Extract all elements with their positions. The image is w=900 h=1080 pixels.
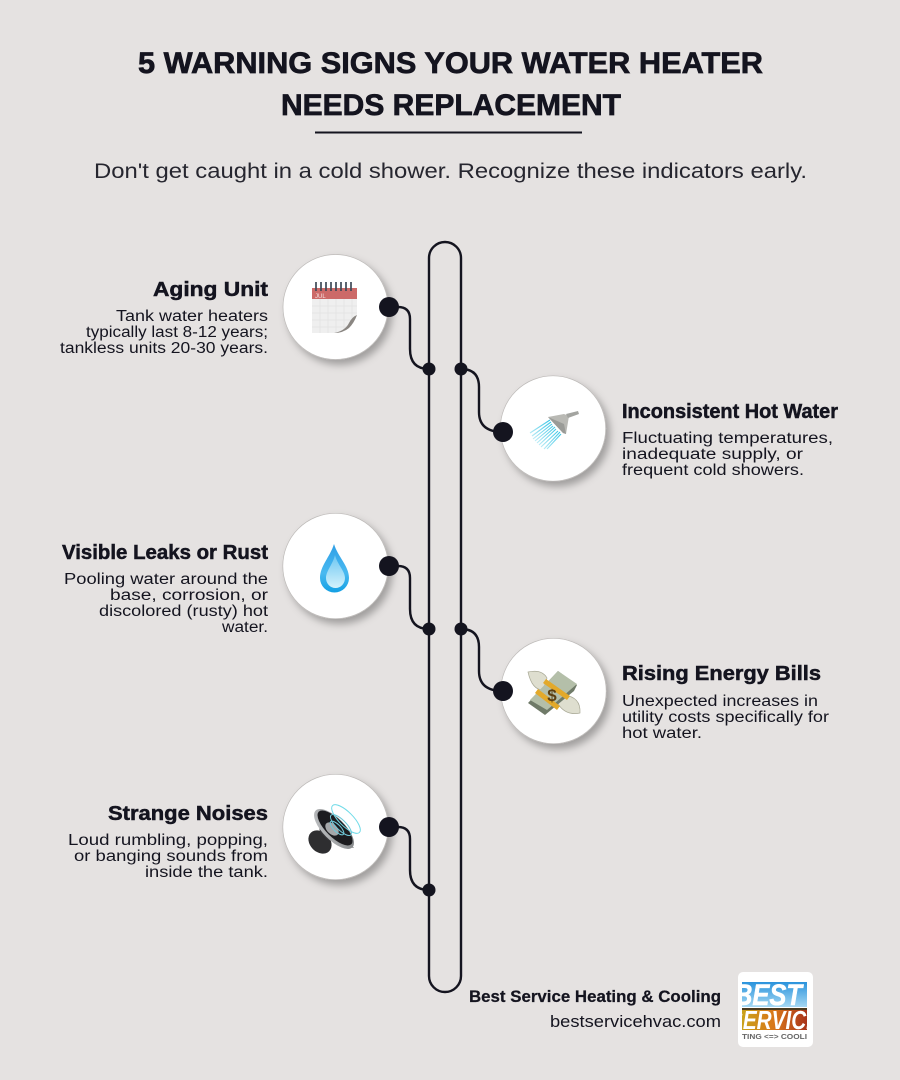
label: aging unit [60,279,268,357]
icon circle: aging unit [283,254,388,360]
label: inconsistent hot water: frequent cold showers. [622,462,804,479]
label: inconsistent hot water: Inconsistent Hot Water [622,401,838,423]
label: inconsistent hot water: inadequate supply, or [622,446,803,463]
logo [738,972,813,1047]
icon circle: shower [500,376,606,481]
label: inconsistent hot water: Fluctuating temperatures, [622,430,833,447]
label: aging unit: typically last 8-12 years; [86,324,268,341]
icon: water drop [320,544,349,592]
footer: company name and website: bestservicehvac.com [550,1012,721,1031]
connector: visible leaks [389,566,436,636]
connector: energy bills [454,622,503,691]
footer: company name and website: Best Service Heating & Cooling [469,987,721,1006]
panel: visible leaks or rust [62,513,399,636]
panel: rising energy bills [493,638,829,744]
title: NEEDS REPLACEMENT [281,89,621,122]
title: 5 WARNING SIGNS YOUR WATER HEATER [138,47,763,80]
label: visible leaks or rust: water. [221,619,268,636]
label: inconsistent hot water [622,401,838,479]
label: visible leaks or rust: discolored (rusty) hot [99,603,269,620]
label: strange noises: or banging sounds from [74,848,268,865]
icon circle: drop [283,513,388,619]
label: rising energy bills: Rising Energy Bills [622,663,821,685]
icon: calendar: JUL [315,294,326,300]
label: aging unit: Aging Unit [153,279,268,301]
label: strange noises: inside the tank. [145,864,268,881]
label: visible leaks or rust [62,542,269,636]
footer: company name and website [469,987,721,1031]
connector: strange noises [389,827,436,896]
title underline [315,132,582,134]
subtitle: Don't get caught in a cold shower. Recognize these indicators early. [94,160,807,183]
logo: BEST [734,979,804,1012]
title [138,47,763,122]
label: strange noises [68,803,268,881]
label: rising energy bills [622,663,829,742]
header [94,47,807,183]
label: visible leaks or rust: Pooling water around the [64,571,268,588]
panel: aging unit [60,254,399,360]
label: rising energy bills: Unexpected increases in [622,693,818,710]
label: strange noises: Loud rumbling, popping, [68,832,268,849]
icon circle: money [501,638,606,744]
icon: money with wings: $ [547,686,557,705]
label: rising energy bills: hot water. [622,725,702,742]
label: aging unit: Tank water heaters [116,308,268,325]
central pipe timeline [429,242,461,992]
label: rising energy bills: utility costs specifically for [622,709,829,726]
logo: SERVICE [729,1005,821,1035]
icon circle: speaker [283,774,388,880]
icon: money with wings [528,671,580,715]
panel: inconsistent hot water [493,376,838,481]
label: strange noises: Strange Noises [108,803,268,825]
connector: inconsistent hot water [454,362,503,432]
icon: speaker [304,801,364,858]
connector: aging unit [389,307,436,376]
logo: TING <=> COOLI [742,1034,807,1041]
label: aging unit: tankless units 20-30 years. [60,340,268,357]
panel: strange noises [68,774,399,881]
label: visible leaks or rust: Visible Leaks or Rust [62,542,268,564]
label: visible leaks or rust: base, corrosion, or [110,587,268,604]
icon: calendar [312,282,357,333]
icon: shower head [530,411,579,449]
